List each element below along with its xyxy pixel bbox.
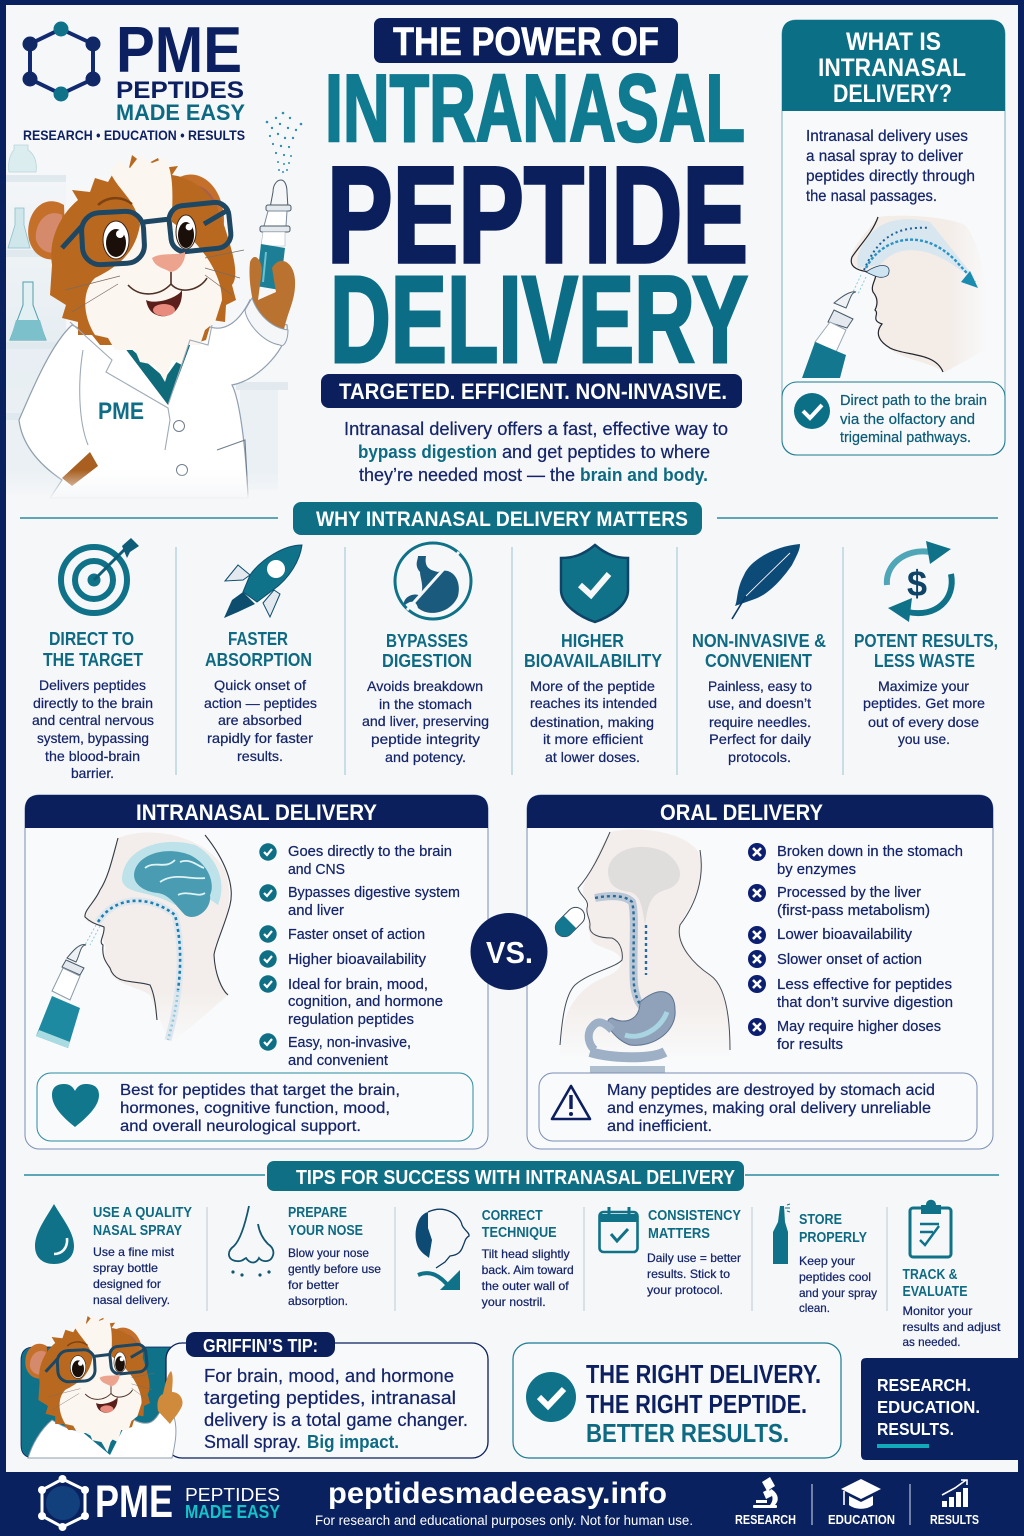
panel: intranasal delivery <box>25 795 488 1149</box>
checklist: oral drawbacks: Lower bioavailability <box>777 927 913 943</box>
panel: the right delivery <box>513 1343 841 1458</box>
checklist: oral drawbacks: by enzymes <box>777 862 856 878</box>
benefit: bypasses digestion <box>362 543 489 765</box>
tip: track and evaluate: Monitor your <box>902 1304 972 1318</box>
benefit: bypasses digestion: and potency. <box>385 749 466 765</box>
icon: tilted head with arrow <box>416 1209 469 1290</box>
title block <box>321 18 748 485</box>
callout: best for peptides: Best for peptides that target the brain, <box>120 1082 400 1099</box>
tip: prepare your nose: Blow your nose <box>288 1246 369 1260</box>
benefit: potent results less waste: out of every dose <box>868 714 979 730</box>
panel: the right delivery: THE RIGHT DELIVERY. <box>586 1359 821 1389</box>
pill: Griffin's tip <box>186 1332 335 1357</box>
panel description: Intranasal delivery uses <box>806 128 968 145</box>
icon: dollar with cycle arrows: $ <box>907 563 927 604</box>
checklist: intranasal benefits: Higher bioavailability <box>288 952 427 968</box>
benefit: non-invasive and convenient: NON-INVASIVE & <box>692 631 826 651</box>
illustration: body with digestive tract and pill <box>552 829 730 1070</box>
intro paragraph: they’re needed most — the <box>359 465 575 485</box>
tip: store properly: STORE <box>799 1212 842 1228</box>
icon: crossed-out stomach <box>395 543 471 619</box>
tip: prepare your nose <box>229 1205 381 1308</box>
illustration: nose profile with spray <box>802 216 987 378</box>
lab background <box>6 145 288 495</box>
tip: use a quality nasal spray: spray bottle <box>93 1261 158 1275</box>
icon: hexagon molecule <box>22 22 100 102</box>
callout: direct path: trigeminal pathways. <box>840 430 971 446</box>
tip: track and evaluate: EVALUATE <box>902 1284 968 1300</box>
benefit: direct to the target <box>32 538 154 781</box>
section heading: tips for success: TIPS FOR SUCCESS WITH INTRANASAL DELIVERY <box>296 1167 736 1189</box>
tip: track and evaluate: results and adjust <box>902 1320 1001 1334</box>
tip text: For brain, mood, and hormone <box>204 1365 454 1386</box>
panel: Griffin's tip <box>21 1316 488 1458</box>
benefit: higher bioavailability: at lower doses. <box>545 749 640 765</box>
icon: spray bottle <box>773 1204 790 1264</box>
benefit: potent results less waste: peptides. Get more <box>863 695 985 711</box>
footer logo <box>38 1475 280 1531</box>
callout: direct path: via the olfactory and <box>840 412 975 428</box>
checklist: intranasal benefits: and convenient <box>288 1053 388 1069</box>
footer icon: results <box>930 1480 979 1527</box>
benefit: direct to the target: the blood-brain <box>45 748 140 764</box>
panel: the right delivery: THE RIGHT PEPTIDE. <box>586 1389 807 1419</box>
checklist: oral drawbacks <box>748 843 963 1053</box>
tip: track and evaluate <box>902 1200 1001 1349</box>
disclaimer: For research and educational purposes only. Not for human use. <box>315 1513 693 1528</box>
tip: use a quality nasal spray <box>35 1204 192 1307</box>
benefit: bypasses digestion: and liver, preserving <box>362 713 489 729</box>
tip: store properly <box>773 1204 877 1315</box>
benefit: bypasses digestion: DIGESTION <box>382 651 472 671</box>
panel description: the nasal passages. <box>806 188 937 205</box>
icon: warning triangle <box>552 1086 590 1119</box>
benefit: potent results less waste: Maximize your <box>878 678 969 694</box>
tip text <box>204 1365 468 1452</box>
spray bottle <box>256 180 291 290</box>
intro paragraph: brain and body. <box>580 465 708 485</box>
icon: drop <box>35 1204 74 1264</box>
benefit: higher bioavailability: BIOAVAILABILITY <box>524 651 662 671</box>
benefit: faster absorption: FASTER <box>228 629 288 649</box>
footer logo: PEPTIDES <box>185 1485 280 1505</box>
callout: stomach acid warning: and enzymes, making oral delivery unreliable <box>607 1100 931 1117</box>
head <box>28 155 244 382</box>
coat label PME: PME <box>98 398 144 425</box>
callout: stomach acid warning: Many peptides are destroyed by stomach acid <box>607 1082 935 1099</box>
tip: use a quality nasal spray: nasal delivery. <box>93 1293 170 1307</box>
callout: stomach acid warning: and inefficient. <box>607 1118 712 1135</box>
benefit: direct to the target: system, bypassing <box>37 730 149 746</box>
callout: direct path <box>782 382 1005 455</box>
footer logo: PME <box>95 1476 173 1527</box>
panel description <box>806 128 975 205</box>
logo: PME Peptides Made Easy: RESEARCH • EDUCATION • RESULTS <box>23 128 245 143</box>
tip text: Big impact. <box>307 1431 399 1452</box>
benefit: faster absorption: Quick onset of <box>214 677 306 693</box>
benefit: higher bioavailability: More of the peptide <box>530 678 655 694</box>
tip: prepare your nose: absorption. <box>288 1294 348 1308</box>
benefit: potent results less waste: you use. <box>898 731 950 747</box>
badge: VS: VS. <box>486 935 533 970</box>
callout: stomach acid warning <box>539 1073 977 1141</box>
benefit: faster absorption: action — peptides <box>204 695 317 711</box>
panel header: WHAT IS <box>846 28 941 56</box>
tip: correct technique: Tilt head slightly <box>482 1247 570 1261</box>
callout: best for peptides: and overall neurological support. <box>120 1118 361 1135</box>
tip: correct technique: CORRECT <box>482 1208 543 1224</box>
logo: PME Peptides Made Easy <box>22 13 245 143</box>
intro paragraph: Intranasal delivery offers a fast, effective way to <box>344 419 728 439</box>
pill: Griffin's tip: GRIFFIN’S TIP: <box>203 1336 318 1356</box>
panel: what is intranasal delivery <box>782 20 1005 455</box>
benefit: bypasses digestion: in the stomach <box>379 696 472 712</box>
checklist: oral drawbacks: May require higher doses <box>777 1019 941 1035</box>
checklist: oral drawbacks: (first-pass metabolism) <box>777 903 930 919</box>
benefit: faster absorption: ABSORPTION <box>205 650 312 670</box>
coat lapels <box>70 322 212 450</box>
benefit: non-invasive and convenient: require needles. <box>709 714 811 730</box>
panel header <box>527 795 993 828</box>
logo: PME Peptides Made Easy: MADE EASY <box>116 100 245 125</box>
intro paragraph: bypass digestion <box>358 442 497 462</box>
footer icon: results: RESULTS <box>930 1513 979 1527</box>
icon: heart <box>52 1084 99 1127</box>
tip: correct technique: back. Aim toward <box>482 1263 574 1277</box>
benefit: higher bioavailability: reaches its intended <box>530 695 657 711</box>
tip: correct technique: TECHNIQUE <box>482 1225 557 1241</box>
sleeve cuff <box>245 298 288 346</box>
panel description: a nasal spray to deliver <box>806 148 963 165</box>
icon: rocket <box>224 545 302 618</box>
benefit: direct to the target: DIRECT TO <box>49 629 134 649</box>
panel header: INTRANASAL <box>818 54 966 82</box>
benefit: non-invasive and convenient: use, and doesn’t <box>708 695 811 711</box>
badge: VS <box>470 913 548 990</box>
tip: correct technique: the outer wall of <box>482 1279 569 1293</box>
coat buttons and pocket <box>174 420 248 495</box>
icon: target with arrow <box>61 538 139 613</box>
footer icon: research: RESEARCH <box>735 1513 796 1527</box>
title word: delivery: DELIVERY <box>330 252 748 389</box>
checklist: intranasal benefits: cognition, and hormone <box>288 994 443 1010</box>
callout: best for peptides: hormones, cognitive function, mood, <box>120 1100 390 1117</box>
benefit: direct to the target: directly to the brain <box>33 695 153 711</box>
benefit: potent results less waste <box>854 541 998 747</box>
checklist: oral drawbacks: Less effective for peptides <box>777 977 952 993</box>
tip: use a quality nasal spray: USE A QUALITY <box>93 1205 192 1221</box>
footer logo: MADE EASY <box>185 1502 280 1522</box>
benefit: non-invasive and convenient <box>692 544 826 765</box>
tip: prepare your nose: PREPARE <box>288 1205 347 1221</box>
benefit: higher bioavailability: HIGHER <box>561 631 624 651</box>
panel header: ORAL DELIVERY <box>660 800 823 825</box>
footer icon: research <box>735 1477 796 1527</box>
spray mist <box>266 112 302 173</box>
panel header <box>25 795 488 828</box>
tip: consistency matters: your protocol. <box>647 1283 723 1297</box>
tip: track and evaluate: as needed. <box>902 1335 960 1349</box>
tip: store properly: peptides cool <box>799 1270 871 1284</box>
benefit: non-invasive and convenient: protocols. <box>728 749 791 765</box>
panel header <box>782 20 1005 111</box>
benefit: faster absorption: are absorbed <box>218 712 302 728</box>
benefit: higher bioavailability: it more efficient <box>543 731 643 747</box>
icon: calendar with check <box>600 1207 638 1252</box>
tip: store properly: PROPERLY <box>799 1230 867 1246</box>
footer <box>0 1472 1024 1536</box>
intro paragraph: and get peptides to where <box>502 442 710 462</box>
benefit: higher bioavailability <box>524 545 662 765</box>
checklist: intranasal benefits: Easy, non-invasive, <box>288 1035 411 1051</box>
tip: correct technique <box>416 1208 574 1309</box>
callout: best for peptides <box>37 1073 473 1141</box>
checklist: oral drawbacks: for results <box>777 1037 843 1053</box>
benefit: potent results less waste: POTENT RESULTS, <box>854 631 998 651</box>
mascot panel background <box>21 1347 172 1458</box>
panel: the right delivery: BETTER RESULTS. <box>586 1418 789 1448</box>
tip: use a quality nasal spray: Use a fine mist <box>93 1245 175 1259</box>
tip: prepare your nose: gently before use <box>288 1262 381 1276</box>
checklist: intranasal benefits: Bypasses digestive system <box>288 885 460 901</box>
tip text: delivery is a total game changer. <box>204 1409 468 1430</box>
checklist: oral drawbacks: that don’t survive digestion <box>777 995 953 1011</box>
benefit: non-invasive and convenient: Painless, easy to <box>708 678 812 694</box>
checklist: intranasal benefits: regulation peptides <box>288 1012 414 1028</box>
icon: shield with check <box>561 545 628 622</box>
icon: clipboard <box>910 1200 951 1257</box>
benefit: faster absorption: results. <box>237 748 283 764</box>
logo: PME Peptides Made Easy: PEPTIDES <box>116 77 244 104</box>
tip: use a quality nasal spray: designed for <box>93 1277 161 1291</box>
benefit: bypasses digestion: peptide integrity <box>371 731 480 747</box>
icon: capsule <box>552 904 588 940</box>
website url: peptidesmadeeasy.info <box>328 1477 667 1510</box>
tip: use a quality nasal spray: NASAL SPRAY <box>93 1223 182 1239</box>
benefit: direct to the target: barrier. <box>71 765 114 781</box>
footer icon: education <box>828 1479 895 1527</box>
tip: correct technique: your nostril. <box>482 1295 546 1309</box>
benefit: potent results less waste: LESS WASTE <box>874 651 975 671</box>
section heading: why intranasal delivery matters <box>20 502 998 535</box>
tip text: targeting peptides, intranasal <box>204 1387 456 1408</box>
lab coat <box>19 300 287 498</box>
title word: peptide: PEPTIDE <box>327 139 748 292</box>
panel header: INTRANASAL DELIVERY <box>136 800 377 825</box>
checklist: intranasal benefits: and liver <box>288 903 344 919</box>
subtitle pill: TARGETED. EFFICIENT. NON-INVASIVE. <box>339 379 727 404</box>
tip: track and evaluate: TRACK & <box>902 1267 958 1283</box>
panel header: DELIVERY? <box>833 80 952 108</box>
subtitle pill <box>321 374 742 408</box>
panel: research education results: RESULTS. <box>877 1419 954 1439</box>
paw in pocket <box>62 452 98 486</box>
tip: prepare your nose: YOUR NOSE <box>288 1223 363 1239</box>
benefit: higher bioavailability: destination, making <box>530 714 654 730</box>
tip: prepare your nose: for better <box>288 1278 339 1292</box>
benefit: faster absorption <box>204 545 317 764</box>
checklist: intranasal benefits: and CNS <box>288 862 345 878</box>
section heading: tips for success <box>24 1161 999 1191</box>
panel: research education results <box>861 1358 1024 1460</box>
panel: research education results: RESEARCH. <box>877 1375 971 1395</box>
checklist: oral drawbacks: Broken down in the stomach <box>777 844 963 860</box>
teal scrubs <box>115 335 192 405</box>
logo: PME Peptides Made Easy: PME <box>116 13 242 86</box>
checklist: intranasal benefits: Ideal for brain, mood, <box>288 977 428 993</box>
panel description: peptides directly through <box>806 168 975 185</box>
tip: consistency matters: results. Stick to <box>647 1267 730 1281</box>
checklist: oral drawbacks: Slower onset of action <box>777 952 922 968</box>
benefit: direct to the target: THE TARGET <box>43 650 143 670</box>
benefit: non-invasive and convenient: Perfect for daily <box>709 731 811 747</box>
tip: store properly: and your spray <box>799 1286 877 1300</box>
checklist: oral drawbacks: Processed by the liver <box>777 885 921 901</box>
mascot illustration: guinea pig in lab coat with nasal spray <box>6 112 302 500</box>
icon: nose <box>229 1206 273 1277</box>
tip text: Small spray. <box>204 1431 301 1452</box>
icon: check badge <box>526 1372 576 1422</box>
tip: consistency matters <box>600 1207 741 1297</box>
hand <box>249 257 295 330</box>
benefit: faster absorption: rapidly for faster <box>207 730 313 746</box>
footer icon: education: EDUCATION <box>828 1513 895 1527</box>
icon: dollar with cycle arrows <box>887 541 952 622</box>
benefit: bypasses digestion: Avoids breakdown <box>367 678 483 694</box>
tip: consistency matters: Daily use = better <box>647 1251 741 1265</box>
benefit: direct to the target: and central nervous <box>32 712 154 728</box>
tip: store properly: Keep your <box>799 1254 855 1268</box>
intro paragraph <box>344 419 728 485</box>
illustration: head with brain and spray <box>36 833 231 1048</box>
tip: consistency matters: CONSISTENCY <box>648 1208 741 1224</box>
mascot: small guinea pig pointing <box>25 1316 183 1458</box>
checklist: intranasal benefits: Faster onset of action <box>288 927 425 943</box>
benefit: direct to the target: Delivers peptides <box>39 677 146 693</box>
section heading: why intranasal delivery matters: WHY INTRANASAL DELIVERY MATTERS <box>316 508 688 531</box>
callout box <box>166 1343 488 1458</box>
benefit: non-invasive and convenient: CONVENIENT <box>705 651 812 671</box>
title word: intranasal: INTRANASAL <box>325 55 745 162</box>
icon: feather <box>732 544 800 619</box>
title pill: the power of: THE POWER OF <box>393 20 659 64</box>
benefit: bypasses digestion: BYPASSES <box>386 631 468 651</box>
checklist: intranasal benefits: Goes directly to the brain <box>288 844 452 860</box>
tip: consistency matters: MATTERS <box>648 1226 710 1242</box>
panel: research education results: EDUCATION. <box>877 1397 980 1417</box>
checklist: intranasal benefits <box>259 843 460 1069</box>
callout: direct path: Direct path to the brain <box>840 393 987 409</box>
panel: oral delivery <box>527 795 993 1149</box>
tip: store properly: clean. <box>799 1301 830 1315</box>
